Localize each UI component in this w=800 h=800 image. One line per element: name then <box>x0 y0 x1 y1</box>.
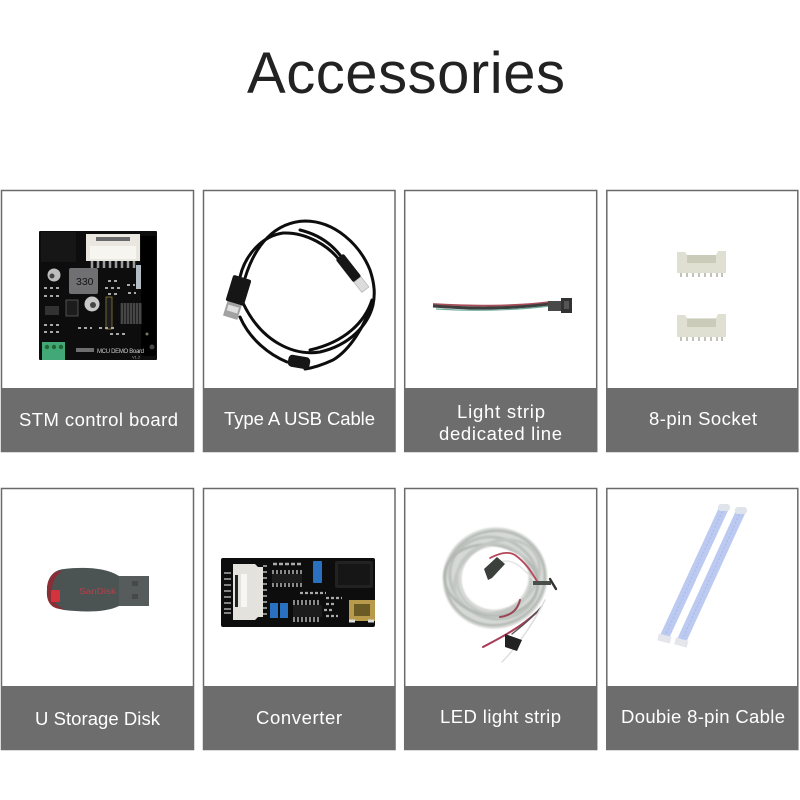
panel: Converter <box>203 488 396 750</box>
panel: 8-pin Socket <box>606 190 798 452</box>
icon: control board: V1.2 <box>132 354 141 360</box>
label: U Storage Disk: U Storage Disk <box>35 708 161 729</box>
icon: socket bottom <box>677 314 726 341</box>
title: Accessories <box>247 41 565 106</box>
icon: control board: 330 <box>76 276 94 288</box>
panel: Double 8-pin Cable <box>606 488 798 750</box>
icon: USB cable <box>221 221 374 370</box>
label: second line: dedicated line <box>439 423 562 444</box>
label: Converter: Converter <box>256 707 342 728</box>
icon: converter board <box>221 558 375 627</box>
icon: control board: MCU DEMO Board <box>97 349 144 355</box>
icon: ribbon cables <box>657 504 747 648</box>
icon: USB flash drive: SanDisk <box>79 586 117 596</box>
panel: STM control board <box>1 190 194 452</box>
panel: U Storage Disk <box>1 488 194 750</box>
label: Light strip dedicated line: Light strip <box>457 401 545 422</box>
icon: control board <box>39 231 157 360</box>
label: 8-pin Socket: 8-pin Socket <box>649 408 757 429</box>
label: Doubie 8-pin Cable: Doubie 8-pin Cable <box>621 706 785 727</box>
panel: Type A USB Cable <box>203 190 396 452</box>
icon: dedicated wire <box>433 298 572 313</box>
icon: USB flash drive <box>47 568 149 611</box>
label: Type A USB Cable: Type A USB Cable <box>224 408 375 429</box>
label: LED light strip: LED light strip <box>440 706 561 727</box>
icon: LED strip coil <box>435 520 556 662</box>
panel: Light strip dedicated line <box>404 190 597 452</box>
label: STM control board: STM control board <box>19 409 178 430</box>
icon: socket top <box>677 251 726 277</box>
panel: LED light strip <box>404 488 597 750</box>
